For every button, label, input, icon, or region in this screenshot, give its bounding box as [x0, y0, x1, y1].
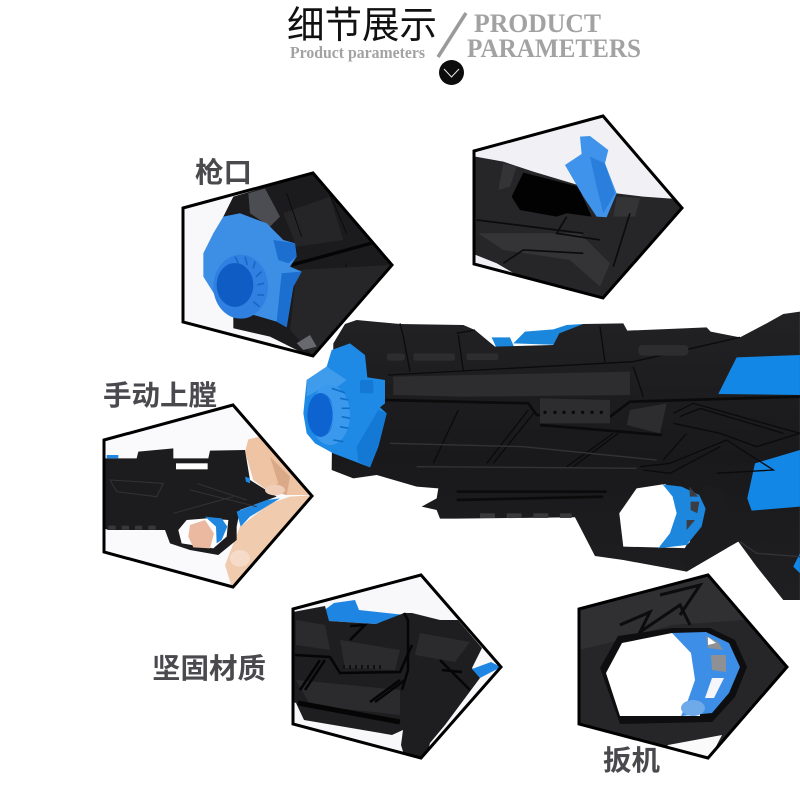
muzzle panel bore [217, 263, 253, 307]
blue side panel lower [747, 450, 800, 511]
panel: muzzle detail [183, 173, 397, 358]
title: heading block: PARAMETERS [467, 33, 641, 63]
label: 枪口: 枪口 [195, 157, 252, 188]
muzzle panel blue cap [203, 213, 302, 327]
label: 扳机: 扳机 [603, 745, 660, 776]
heading: PRODUCT PARAMETERS: PRODUCT [474, 8, 601, 38]
icon: chevron in black circle [439, 60, 464, 85]
slash divider [438, 13, 466, 57]
material panel gun body [288, 606, 482, 758]
panel: trigger detail [579, 575, 787, 762]
trigger [658, 484, 730, 572]
panel: chamber detail [472, 116, 690, 300]
muzzle panel gun body [218, 173, 397, 358]
muzzle cap [303, 343, 387, 467]
gun top blue parts [492, 324, 583, 348]
panel: material detail [288, 575, 501, 758]
surface lines [385, 323, 800, 557]
trigger panel blue trigger [672, 632, 740, 716]
title: heading block [287, 4, 641, 85]
loading panel gun [104, 448, 277, 555]
trigger panel opening [606, 633, 700, 716]
ejected blue clip [565, 136, 617, 217]
label: 坚固材质: 坚固材质 [152, 653, 266, 684]
loading panel thumb nail [230, 550, 250, 567]
trigger guard opening [619, 484, 690, 548]
material panel blue tip [472, 662, 501, 678]
chamber opening [512, 173, 592, 217]
gun body [332, 312, 800, 600]
panel: manual loading detail [104, 405, 317, 590]
muzzle bore [307, 393, 334, 437]
rail notches [480, 513, 572, 518]
vent dots [543, 411, 603, 414]
blue side panel upper [718, 355, 800, 395]
label: 手动上膛: 手动上膛 [103, 380, 217, 411]
top panel highlights [387, 345, 688, 433]
material panel blue slide [323, 600, 405, 624]
trigger panel frame highlights [579, 575, 745, 650]
subheading: Product parameters: Product parameters [290, 43, 426, 62]
main gun illustration [303, 312, 800, 600]
heading: 细节展示: 细节展示 [287, 4, 437, 46]
loading panel finger [188, 520, 214, 548]
grip blue [793, 553, 800, 573]
chamber panel gun body [472, 156, 690, 300]
loading panel hand [245, 437, 309, 495]
